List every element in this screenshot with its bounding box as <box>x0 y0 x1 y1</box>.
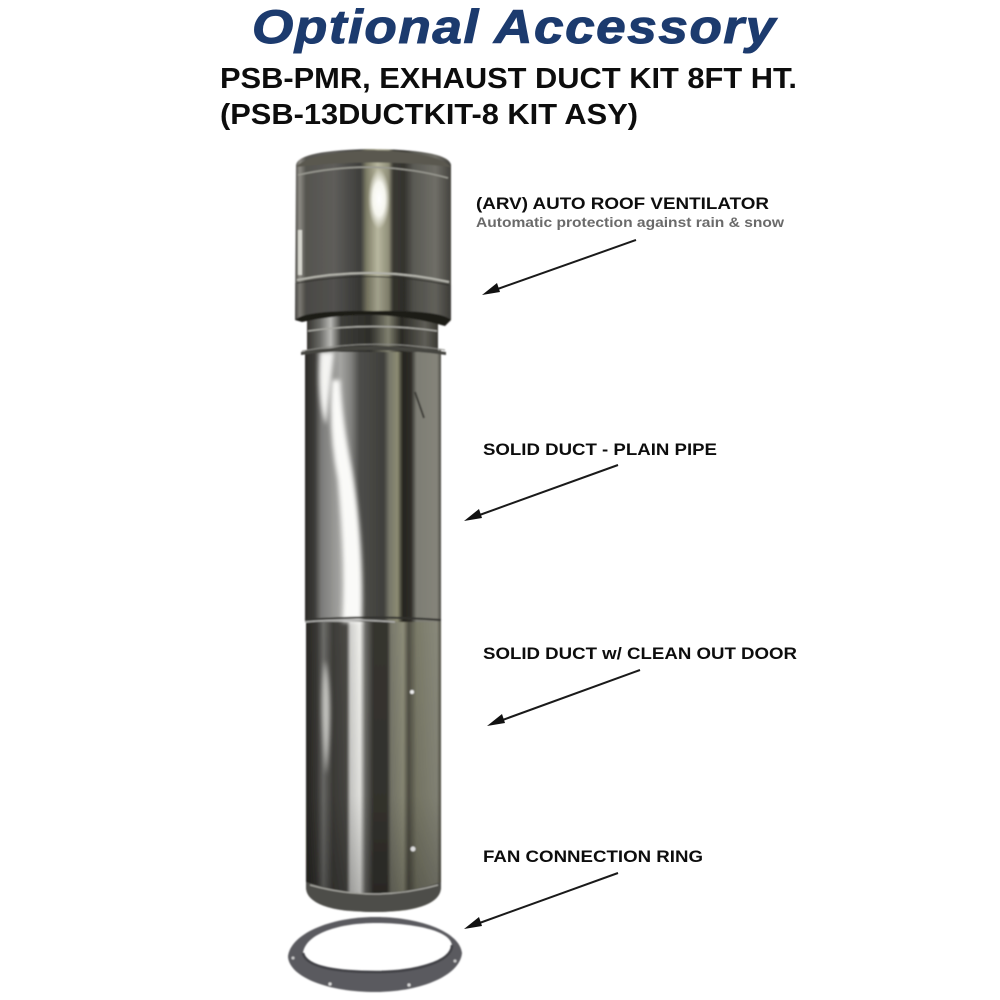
label: auto roof ventilator: (ARV) AUTO ROOF VENTILATOR <box>476 194 769 213</box>
label: auto roof ventilator <box>476 194 784 230</box>
title: Optional Accessory <box>252 1 777 53</box>
lower duct with clean out door <box>306 622 441 912</box>
duct assembly <box>295 149 451 912</box>
label: fan connection ring: FAN CONNECTION RING <box>483 847 703 866</box>
subtitle: product name <box>220 63 797 131</box>
arrow: to plain pipe <box>464 465 618 521</box>
label: auto roof ventilator: Automatic protection against rain & snow <box>476 214 784 230</box>
subtitle: product name: (PSB-13DUCTKIT-8 KIT ASY) <box>220 99 638 131</box>
arrow: to clean out door <box>487 670 640 726</box>
arrow: to ventilator <box>482 240 636 295</box>
subtitle: product name: PSB-PMR, EXHAUST DUCT KIT 8FT HT. <box>220 63 797 95</box>
fan connection ring <box>288 917 462 992</box>
cap: auto roof ventilator <box>295 149 451 326</box>
upper plain pipe <box>305 350 441 622</box>
neck and flange <box>301 304 446 355</box>
label: solid duct with clean out door: SOLID DUCT w/ CLEAN OUT DOOR <box>483 644 797 663</box>
label: solid duct plain pipe: SOLID DUCT - PLAIN PIPE <box>483 440 717 459</box>
arrow: to connection ring <box>464 873 618 929</box>
